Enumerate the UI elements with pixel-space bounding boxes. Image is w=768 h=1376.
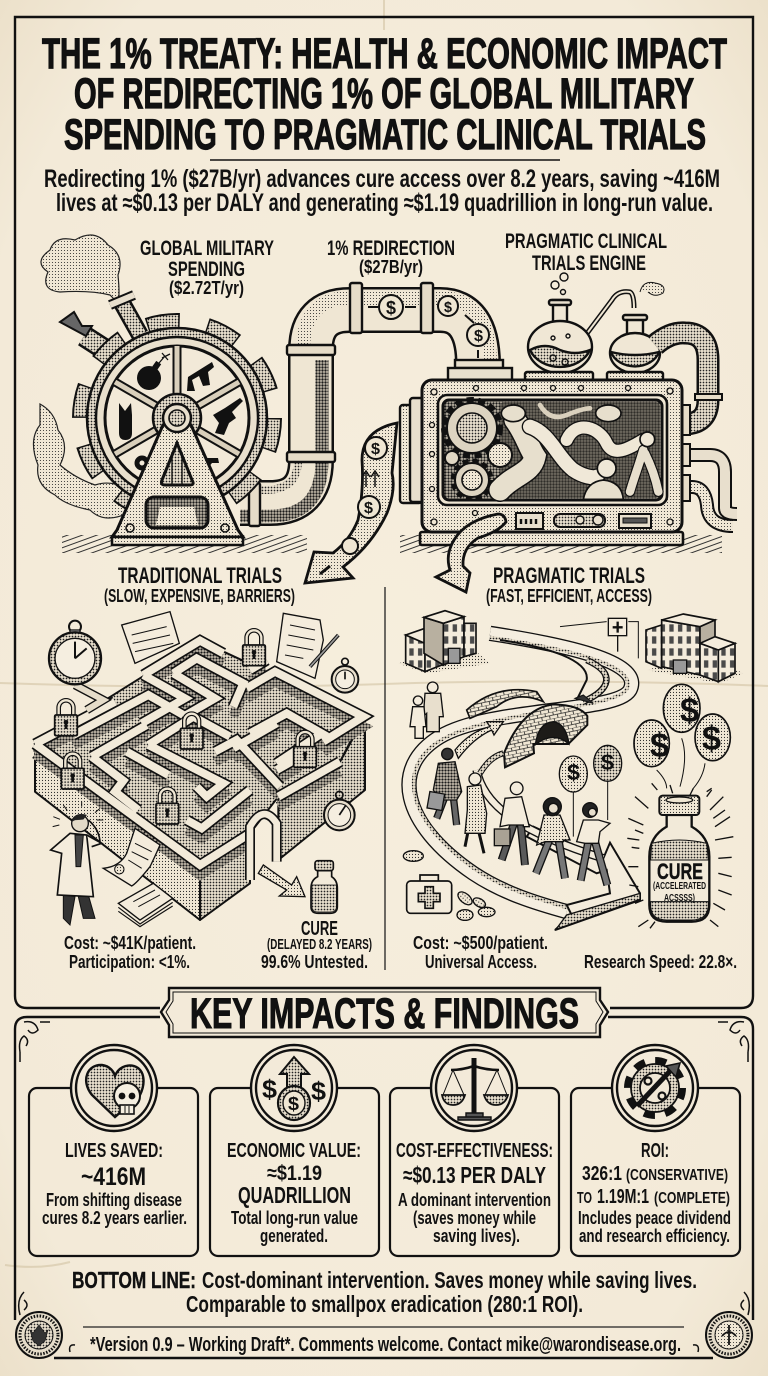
icon: rising dollar: $ [311, 1076, 327, 1106]
card: economic value: ≈$1.19 [267, 1162, 322, 1185]
pills and coin [403, 851, 495, 920]
dollar signs on pipe coins [386, 298, 483, 345]
card: cost-effectiveness: COST-EFFECTIVENESS: [396, 1140, 553, 1162]
arrow: engine to pragmatic trials [436, 514, 506, 592]
illustration: flasks [525, 273, 664, 380]
bottom line text [72, 1267, 697, 1317]
maze exit arch [250, 814, 277, 880]
inner path [477, 770, 603, 858]
seal left [16, 1312, 62, 1358]
gear hub [153, 394, 201, 442]
label: global military spending: ($2.72T/yr) [169, 278, 244, 298]
arrow to delayed cure [258, 865, 305, 897]
text: traditional cost: Participation: <1%. [69, 952, 190, 972]
dollar signs on pipe coins: $ [444, 299, 453, 316]
icon: rising dollar: $ [288, 1094, 299, 1114]
card: lives saved: cures 8.2 years earlier. [42, 1208, 187, 1228]
card: lives saved [29, 1045, 198, 1256]
window gears [444, 400, 512, 499]
label: 1% redirection [327, 237, 455, 277]
road swoosh [409, 633, 632, 912]
heading: pragmatic trials [486, 563, 652, 606]
small curved arrow [455, 722, 503, 758]
heading: pragmatic trials: (FAST, EFFICIENT, ACCESS) [486, 586, 652, 606]
icon: rising dollar [251, 1045, 337, 1131]
text: delayed cure: 99.6% Untested. [261, 952, 368, 972]
illustration: military spending gear [80, 321, 274, 545]
balloon dollar signs: $ [567, 760, 580, 785]
label: global military spending: GLOBAL MILITARY [140, 237, 274, 260]
seal right [706, 1312, 752, 1358]
balloons [559, 684, 730, 837]
vial label text [653, 859, 706, 904]
illustration: exhaust chimney and missile [60, 295, 140, 356]
gear spokes [115, 346, 239, 490]
curled paper and stack [103, 828, 173, 927]
card: cost-effectiveness: saving lives). [433, 1226, 520, 1246]
arrow: funding ribbon to traditional trials: $ [371, 441, 380, 458]
card: lives saved: From shifting disease [46, 1190, 182, 1210]
illustration: traditional trials maze panel [35, 612, 365, 927]
icon: gear with percent [612, 1045, 698, 1131]
label: 1% redirection: ($27B/yr) [359, 257, 423, 277]
pipe flanges [249, 283, 433, 526]
money coins in pipe [379, 295, 489, 346]
dollar signs on pipe coins: $ [386, 298, 396, 318]
first aid kit [407, 875, 452, 913]
illustration: smoke clouds [33, 235, 130, 518]
walker 5 [577, 803, 610, 885]
label: 1% redirection: 1% REDIRECTION [327, 237, 455, 260]
heading: pragmatic trials: PRAGMATIC TRIALS [493, 563, 645, 588]
card: roi: ROI: [641, 1140, 669, 1162]
text: pragmatic cost [413, 933, 548, 972]
title [42, 30, 727, 159]
lower panel frame [15, 1017, 753, 1358]
icon: bomb [137, 353, 170, 390]
machine window: gears and patients [443, 400, 662, 500]
vial rays [627, 783, 733, 928]
window figures [500, 405, 658, 499]
card: roi: (CONSERVATIVE) [626, 1167, 728, 1184]
vial label text: CURE [657, 859, 703, 884]
card: roi [571, 1045, 740, 1256]
card: economic value: generated. [260, 1226, 328, 1246]
road arrowhead [527, 827, 640, 930]
label: pragmatic clinical trials engine: PRAGMATIC CLINICAL [505, 230, 667, 253]
maze floor [35, 641, 363, 865]
card: cost-effectiveness: (saves money while [413, 1208, 536, 1228]
road sign [560, 618, 638, 658]
card: cost-effectiveness: ≈$0.13 PER DALY [403, 1162, 546, 1188]
label: pragmatic clinical trials engine [505, 230, 667, 275]
dollar signs on pipe coins: $ [474, 328, 483, 345]
card: economic value: Total long-run value [231, 1208, 358, 1228]
maze exterior walls [35, 717, 365, 920]
banner: key impacts and findings [161, 988, 608, 1038]
walker 4 [536, 798, 570, 878]
card: lives saved: LIVES SAVED: [65, 1140, 163, 1162]
stopwatch small lower right [324, 791, 355, 830]
maze walls [35, 641, 363, 865]
icon: heart and skull [71, 1045, 157, 1131]
icon: balance scales [431, 1045, 517, 1131]
vial label text: ACSSSS) [664, 893, 695, 904]
illustration: pipe carrying money [240, 283, 490, 526]
bottom line text: BOTTOM LINE: [72, 1267, 196, 1293]
text: pragmatic cost: Universal Access. [425, 952, 537, 972]
subtitle [44, 165, 720, 217]
outer frame: upper section [15, 17, 753, 1008]
card: roi: TO [577, 1190, 592, 1207]
text: pragmatic cost: Cost: ~$500/patient. [413, 933, 548, 953]
walker 2 [465, 773, 487, 853]
heading: traditional trials [104, 563, 295, 606]
illustration: clinical trials engine [400, 360, 683, 545]
card: cost-effectiveness [390, 1045, 559, 1256]
cure vial [649, 796, 709, 922]
card: economic value: ECONOMIC VALUE: [227, 1140, 361, 1162]
cure vial [311, 861, 337, 913]
text: traditional cost [64, 933, 196, 972]
card: roi: (COMPLETE) [654, 1190, 730, 1207]
document and pen [277, 613, 338, 678]
vial label text: (ACCELERATED [653, 881, 706, 892]
text: traditional cost: Cost: ~$41K/patient. [64, 933, 196, 953]
card: lives saved: ~416M [81, 1163, 146, 1191]
icon: wrench [201, 458, 219, 468]
stopwatch large [49, 621, 103, 710]
illustration: shadow under gear [62, 535, 307, 553]
card: roi: 1.19M:1 [597, 1186, 649, 1208]
stopwatch small upper right [332, 658, 358, 693]
balloon dollar signs: $ [702, 720, 721, 758]
label: global military spending [140, 237, 274, 298]
illustration: right-hand pipes [655, 333, 737, 526]
banner: key impacts and findings: KEY IMPACTS & FINDINGS [190, 990, 579, 1038]
walker 3 [494, 782, 529, 865]
control panel [516, 513, 651, 529]
balloon dollar signs: $ [601, 750, 614, 775]
back bridge [467, 690, 543, 718]
card: roi: 326:1 [582, 1163, 622, 1185]
brick bridge and tunnel [480, 704, 587, 773]
scientist [51, 802, 103, 925]
heading: traditional trials: (SLOW, EXPENSIVE, BARRIERS) [104, 586, 295, 606]
a-frame stand [112, 425, 243, 537]
hospital right [646, 614, 743, 683]
label: pragmatic clinical trials engine: TRIALS ENGINE [532, 252, 646, 275]
icon: rifle [213, 398, 243, 435]
card: cost-effectiveness: A dominant intervention [398, 1190, 551, 1210]
illustration: pragmatic trials panel [398, 611, 743, 930]
document with chart [122, 612, 179, 663]
balloon dollar signs [567, 692, 721, 785]
label: global military spending: SPENDING [168, 258, 245, 281]
icon: rising dollar: $ [262, 1074, 278, 1104]
icon: pistol [187, 362, 214, 391]
arrow: funding ribbon to traditional trials [305, 423, 397, 583]
text: delayed cure: CURE [301, 918, 338, 940]
balloon dollar signs: $ [680, 692, 699, 730]
arrow: funding ribbon to traditional trials: $ [364, 500, 373, 517]
illustration: shadow under engine [400, 535, 722, 553]
rivets [430, 386, 673, 525]
maze wall faces [35, 651, 363, 875]
bystanders [410, 682, 443, 738]
card: economic value [210, 1045, 379, 1256]
icon: aerial bomb [119, 403, 132, 440]
icon: small gear [137, 458, 147, 468]
card: economic value: QUADRILLION [238, 1182, 351, 1208]
walker 1 [427, 748, 462, 825]
text: delayed cure [261, 918, 372, 972]
balloon dollar signs: $ [650, 727, 669, 765]
padlocks [55, 630, 316, 824]
heading: traditional trials: TRADITIONAL TRIALS [118, 563, 282, 588]
bottom line text: Comparable to smallpox eradication (280:1 ROI). [186, 1291, 583, 1317]
hospital left [398, 611, 490, 673]
text: delayed cure: (DELAYED 8.2 YEARS) [267, 936, 372, 953]
corner ornaments [19, 1022, 749, 1352]
